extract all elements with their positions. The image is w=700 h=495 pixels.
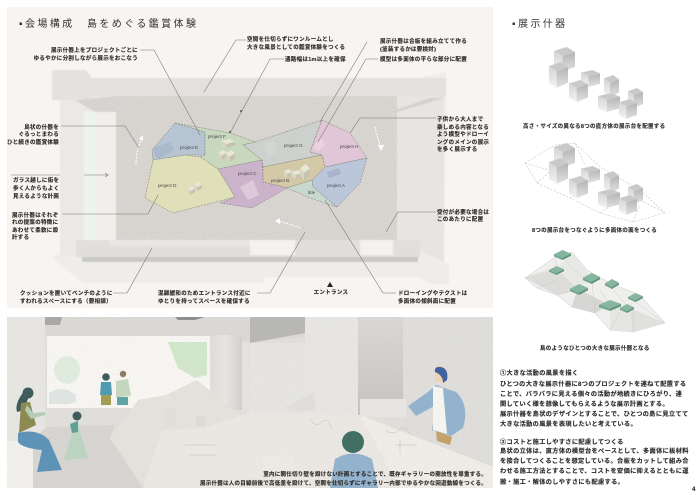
- zone: project C: [218, 160, 287, 208]
- text block: cost and construction: 島状の立体は、直方体の模型台をベースとして、多面体に板材料: [500, 447, 689, 455]
- callout: reception: このあたりに配置: [437, 215, 484, 223]
- callout: one room: [204, 35, 345, 92]
- scene: grain texture: [7, 317, 493, 488]
- callout: flexible design: 展示什器はそれぞ: [12, 211, 59, 219]
- zone: project D: [145, 155, 235, 213]
- panel: perspective scene: [7, 317, 493, 488]
- text block: cost and construction: [500, 438, 689, 486]
- zone: project G: [243, 120, 322, 167]
- zone labels: title: [308, 190, 316, 195]
- text block: activity landscape: 大きな活動の風景を表現したいと考えている。: [500, 420, 637, 428]
- callout: cushion bench: すわれるスペースにする（要相談）: [20, 297, 112, 305]
- scene: trees: [54, 342, 207, 384]
- callout: entrance congestion: 混雑緩和のためエントランス付近に: [158, 289, 251, 297]
- callout: view through glass: 見えるような計画: [13, 192, 59, 200]
- zone labels: project H: [340, 144, 358, 149]
- person: child: [64, 412, 88, 460]
- island: project zones: [145, 120, 367, 213]
- text block: activity landscape: ことで、バラバラに見える個々の活動が地続きにひろがり、連: [500, 390, 683, 398]
- caption: polyhedron wireframe: 8つの展示台をつなぐように多面体の面をつくる: [532, 226, 657, 234]
- callout: reception: [386, 208, 489, 232]
- callout: project division: [34, 46, 200, 135]
- person: window visitor right: [116, 371, 131, 405]
- scene: left wall: [7, 317, 45, 442]
- callout: flexible design: [12, 195, 158, 241]
- callout: view through glass: ガラス越しに街を: [13, 176, 59, 184]
- diagram: eight boxes: [549, 47, 643, 119]
- zone: project F: [175, 123, 262, 169]
- zone: project E: [152, 123, 205, 160]
- callout: entrance congestion: ゆとりを持ってスペースを確保する: [158, 297, 250, 305]
- callout: cushion bench: [20, 248, 152, 305]
- callout: flexible design: 計する: [12, 233, 29, 241]
- callout: passage width: 通路幅は1m以上を確保: [285, 55, 346, 63]
- model blocks on island: [153, 137, 341, 200]
- zone labels: project F: [208, 134, 226, 139]
- person: man in blue jacket: [408, 366, 465, 445]
- zone labels: project C: [238, 171, 257, 176]
- callout: model placement: 模型は多面体の平らな部分に配置: [380, 55, 467, 63]
- entrance marker: エントランス: [314, 289, 349, 296]
- callout: drawings and text: ドローイングやテクストは: [398, 289, 468, 297]
- callout: for children and adults: を多く展示する: [437, 145, 478, 153]
- callout: model placement: [318, 55, 467, 142]
- zone labels: project A: [327, 183, 346, 188]
- callout: view through glass: [11, 173, 108, 200]
- floor plan: building walls and floor: [52, 70, 449, 284]
- person: seated woman: [16, 388, 62, 472]
- callout: for children and adults: 楽しめる内容となる: [437, 123, 489, 131]
- zone labels: [158, 134, 358, 195]
- callout: for children and adults: 子供から大人まで: [437, 115, 484, 123]
- callout: for children and adults: [350, 115, 489, 153]
- zone labels: project E: [180, 145, 198, 150]
- callout: for children and adults: よう模型やドローイ: [437, 130, 489, 138]
- entrance marker: [314, 282, 349, 296]
- callout: drawings and text: 多面体の傾斜面に配置: [398, 297, 456, 305]
- scene: mid column: [212, 335, 242, 410]
- callout: walk around island: ぐるっとまわる: [18, 131, 59, 138]
- callout: walk around island: [7, 123, 139, 148]
- text block: activity landscape: ①大きな活動の風景を描く: [500, 369, 578, 377]
- scene caption: [200, 470, 487, 487]
- callout: plywood: 展示什器は合板を組み立てて作る: [380, 37, 467, 45]
- title: ▪会場構成 島をめぐる鑑賞体験: [19, 17, 198, 30]
- zone labels: project G: [284, 143, 303, 148]
- callout: drawings and text: [325, 200, 468, 305]
- text block: activity landscape: 展示什器を島状のデザインとすることで、ひとつの島に見立てて: [500, 410, 689, 418]
- diagram: island fixture: [525, 250, 665, 332]
- callout: entrance congestion: [158, 232, 305, 305]
- callout: passage width: [229, 55, 346, 133]
- scene caption: 展示什器は人の目線前後で高低差を設けて、空間を仕切らずにギャラリー内部でゆるやかな回遊動線をつくる。: [200, 479, 487, 487]
- zone: project A: [312, 158, 367, 207]
- callout: one room: 空間を仕切らずにワンルームとし: [247, 35, 334, 43]
- text block: activity landscape: 関していく様を想像してもらえるような展示計画とする。: [500, 400, 669, 408]
- scene: column: [305, 317, 358, 417]
- callout: one room: 大きな風景としての鑑賞体験をつくる: [247, 43, 345, 51]
- scene: parked car: [49, 389, 76, 404]
- floor plan: grain texture: [116, 96, 397, 240]
- callout: flexible design: あわせて柔軟に設: [12, 226, 59, 234]
- caption: island fixture: 島のようなひとつの大きな展示什器となる: [540, 344, 650, 352]
- caption: eight boxes: 高さ・サイズの異なる8つの直方体の展示台を配置する: [523, 122, 665, 130]
- zone: project B: [263, 155, 325, 188]
- text block: activity landscape: ひとつの大きな展示什器に8つのプロジェクトを連ねて配置する: [500, 380, 686, 388]
- heading: display fixtures: ▪展示什器: [512, 18, 568, 30]
- callout: project division: 展示什器上をプロジェクトごとに: [51, 46, 138, 54]
- scene: floor: [32, 425, 143, 488]
- zone labels: project B: [271, 178, 289, 183]
- zone: project H: [310, 120, 367, 167]
- callout: walk around island: 島状の什器を: [24, 123, 59, 131]
- scene: right wall: [403, 317, 493, 467]
- callout: plywood: (塗装するかは要検討): [380, 45, 436, 53]
- callout: flexible design: れの提案の特徴に: [12, 218, 58, 226]
- panel: floor plan background: [7, 7, 493, 308]
- diagram: polyhedron wireframe: [525, 143, 665, 222]
- callout: reception: 受付が必要な場合は: [437, 208, 489, 216]
- text block: cost and construction: 搬・施工・解体のしやすさにも配慮する。: [500, 478, 624, 486]
- person: window visitor left: [100, 373, 112, 405]
- scene: island display: [110, 380, 493, 488]
- text block: activity landscape: [500, 369, 689, 428]
- text block: cost and construction: わせる施工方法とすることで、コストを安価に抑えるとともに運: [500, 467, 689, 475]
- scene: ceiling: [40, 317, 305, 342]
- callout: project division: ゆるやかに分割しながら展示をおこなう: [34, 54, 138, 62]
- circulation arrows: [136, 127, 384, 228]
- text block: cost and construction: ②コストと施工しやすさに配慮してつくる: [500, 438, 624, 446]
- scene: window: [47, 336, 210, 408]
- zone labels: project D: [158, 183, 177, 188]
- callout: cushion bench: クッションを置いてベンチのように: [20, 289, 113, 297]
- callout: walk around island: ひと続きの鑑賞体験: [7, 138, 59, 146]
- callout: for children and adults: ングのメインの展示: [437, 138, 489, 146]
- callout: plywood: [320, 37, 467, 122]
- person: boy from behind: [330, 431, 378, 488]
- zone: title: [287, 180, 337, 207]
- scene caption: 室内に間仕切り壁を設けない計画とすることで、既存ギャラリーの開放性を尊重する。: [263, 470, 487, 478]
- page number: 4: [692, 486, 696, 493]
- text block: cost and construction: を接合してつくることを想定している。合板をカットして組み合: [500, 457, 689, 465]
- callout: view through glass: 歩く人からもよく: [13, 184, 59, 192]
